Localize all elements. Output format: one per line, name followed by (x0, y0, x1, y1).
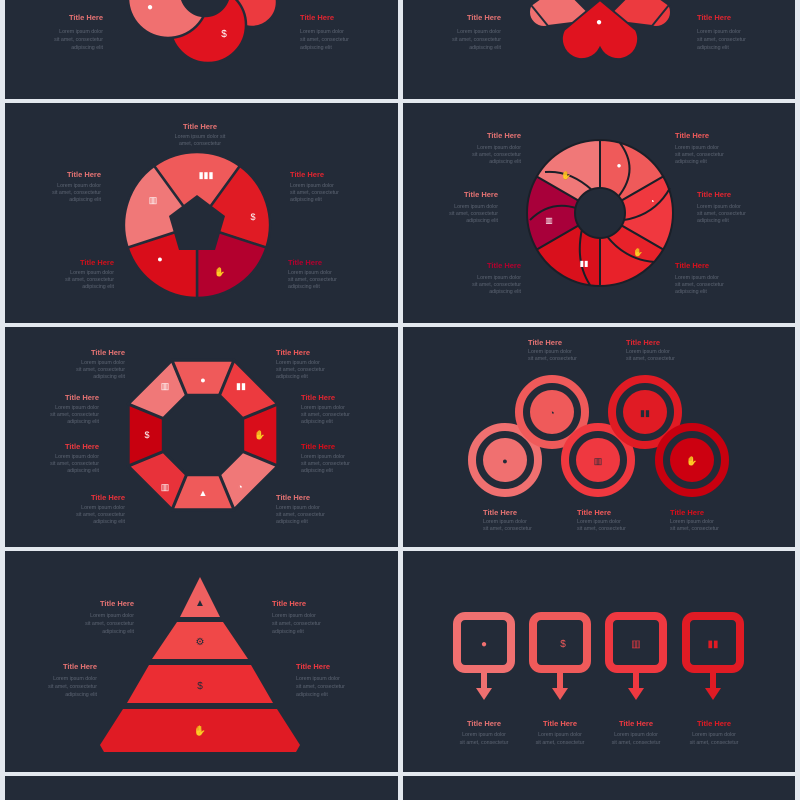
text: mid-right: Lorem ipsum dolor (697, 204, 741, 210)
text: right: Title Here (300, 13, 334, 22)
text: labels: Title Here (63, 662, 97, 671)
text: labels: Lorem ipsum dolor (55, 454, 99, 460)
pyramid layers: ▲ (195, 598, 205, 609)
text: labels: adipiscing elit (301, 419, 333, 425)
text: labels: Title Here (276, 348, 310, 357)
text: labels: Lorem ipsum dolor (296, 676, 340, 682)
text: labels: sit amet, consectetur (85, 621, 134, 627)
text: left: Lorem ipsum dolor (57, 183, 101, 189)
panel: boxes with arrows (457, 616, 740, 746)
text: labels: sit amet, consectetur (76, 367, 125, 373)
text: top-left (472, 131, 522, 165)
text: right: adipiscing elit (697, 45, 729, 51)
text: left: sit amet, consectetur (52, 190, 101, 196)
pyramid layers (100, 577, 300, 752)
pentagon circle chart: ▮▮▮ (199, 170, 213, 180)
pentagon circle chart: ✋ (214, 266, 226, 277)
text: mid-left: Lorem ipsum dolor (454, 204, 498, 210)
text: right: Lorem ipsum dolor (300, 29, 344, 35)
text: labels: adipiscing elit (93, 374, 126, 380)
text: bottom-left: Title Here (80, 258, 114, 267)
swirl diagram: $ (221, 29, 227, 40)
hearts diagram: ● (596, 17, 602, 28)
text: mid-right (697, 190, 746, 224)
text: bottom-right: sit amet, consectetur (288, 277, 337, 283)
text: right: Title Here (290, 170, 324, 179)
text: labels: sit amet, consectetur (301, 461, 350, 467)
text: labels: sit amet, consectetur (276, 367, 325, 373)
text: labels (48, 599, 345, 698)
text: left (52, 170, 102, 203)
box 4 (686, 616, 740, 700)
text: mid-right: Title Here (697, 190, 731, 199)
text: bottom-right (288, 258, 337, 290)
ring inner circles: ▮▮ (640, 408, 650, 418)
panel: pentagon cycle (52, 122, 339, 298)
box 3 (609, 616, 663, 700)
pentagon circle chart: $ (250, 212, 256, 222)
text: labels: Title Here (543, 719, 577, 728)
octagon ring: ● (200, 375, 206, 385)
text: labels: Lorem ipsum dolor (670, 519, 714, 525)
octagon ring: ▥ (161, 381, 169, 391)
text: labels: sit amet, consectetur (301, 412, 350, 418)
swirl chart (527, 140, 673, 286)
text: bottom-left: adipiscing elit (489, 289, 522, 295)
text: labels: adipiscing elit (102, 629, 135, 635)
ring inner circles (483, 390, 714, 482)
text: labels: Title Here (483, 508, 517, 517)
pyramid layers: ⚙ (196, 637, 205, 648)
text: labels: Lorem ipsum dolor (276, 360, 320, 366)
text: top-right: sit amet, consectetur (675, 152, 724, 158)
panel: swirl top-left (54, 0, 349, 63)
text: left (452, 13, 502, 51)
text: labels: Title Here (91, 493, 125, 502)
panel: pyramid (48, 577, 345, 752)
text: labels: Lorem ipsum dolor (692, 732, 736, 738)
rings (472, 379, 725, 493)
text: labels: Title Here (670, 508, 704, 517)
swirl diagram: ● (147, 2, 153, 13)
box 4: ▮▮ (707, 639, 719, 650)
text: left: adipiscing elit (71, 45, 104, 51)
text: bottom-left: Lorem ipsum dolor (477, 275, 521, 281)
text: bottom-right: adipiscing elit (675, 289, 707, 295)
text: labels: Title Here (301, 442, 335, 451)
text: bottom-right: Title Here (288, 258, 322, 267)
hearts diagram (529, 0, 671, 59)
text: labels: Lorem ipsum dolor (462, 732, 506, 738)
text: mid-right: adipiscing elit (697, 218, 729, 224)
ring inner circles: ● (502, 456, 508, 466)
text: right: Title Here (697, 13, 731, 22)
panel: ring chain (472, 338, 725, 532)
pyramid layers: $ (197, 681, 203, 692)
text: labels: Lorem ipsum dolor (53, 676, 97, 682)
text: labels: sit amet, consectetur (690, 740, 739, 746)
text: labels: sit amet, consectetur (536, 740, 585, 746)
text: top-left: Lorem ipsum dolor (477, 145, 521, 151)
text: bottom-left: Lorem ipsum dolor (70, 270, 114, 276)
text: labels: Lorem ipsum dolor (577, 519, 621, 525)
text: bottom-left (65, 258, 115, 290)
text: labels: adipiscing elit (276, 374, 308, 380)
text: left: Lorem ipsum dolor (457, 29, 501, 35)
text: top-left: Title Here (487, 131, 521, 140)
text: labels: sit amet, consectetur (670, 526, 719, 532)
text: top-right (675, 131, 724, 165)
text: right: adipiscing elit (300, 45, 332, 51)
text: labels: sit amet, consectetur (296, 684, 345, 690)
text: labels: sit amet, consectetur (276, 512, 325, 518)
ring inner circles: ▥ (594, 456, 602, 466)
text: top-left: adipiscing elit (489, 159, 522, 165)
text: labels: sit amet, consectetur (48, 684, 97, 690)
octagon ring: ✋ (254, 429, 266, 440)
swirl chart: ▥ (545, 216, 553, 225)
panel: hearts top-right (452, 0, 746, 59)
box 2 (533, 616, 587, 700)
text: top-left: sit amet, consectetur (472, 152, 521, 158)
text: bottom-right: Title Here (675, 261, 709, 270)
text: left: adipiscing elit (469, 45, 502, 51)
text: mid-left: sit amet, consectetur (449, 211, 498, 217)
octagon ring: $ (144, 430, 150, 440)
text: labels: adipiscing elit (301, 468, 333, 474)
swirl chart: ▮▮ (580, 259, 588, 268)
text: labels: Title Here (91, 348, 125, 357)
octagon ring: ◔ (237, 482, 243, 492)
pentagon circle chart (124, 152, 270, 298)
text: labels: Lorem ipsum dolor (276, 505, 320, 511)
text: labels: Title Here (619, 719, 653, 728)
text: labels: Title Here (65, 393, 99, 402)
text: bottom-left: sit amet, consectetur (65, 277, 114, 283)
swirl chart: ● (617, 161, 622, 170)
text: labels: Lorem ipsum dolor (301, 405, 345, 411)
box 2: $ (560, 639, 566, 650)
text: mid-left: adipiscing elit (466, 218, 499, 224)
text: labels: Lorem ipsum dolor (301, 454, 345, 460)
text: labels: sit amet, consectetur (483, 526, 532, 532)
text: labels: Lorem ipsum dolor (528, 349, 572, 355)
text: labels: Lorem ipsum dolor (626, 349, 670, 355)
text: labels: Title Here (272, 599, 306, 608)
text: labels: adipiscing elit (272, 629, 304, 635)
text: labels: sit amet, consectetur (76, 512, 125, 518)
text: bottom-left: adipiscing elit (82, 284, 115, 290)
text: left: Lorem ipsum dolor (59, 29, 103, 35)
box 1 (457, 616, 511, 700)
octagon ring: ▥ (161, 482, 169, 492)
text: top-right: adipiscing elit (675, 159, 707, 165)
text: left: adipiscing elit (69, 197, 102, 203)
text: right (290, 170, 339, 203)
text: left: sit amet, consectetur (452, 37, 501, 43)
text: labels: Lorem ipsum dolor (483, 519, 527, 525)
octagon ring: ▮▮ (236, 381, 246, 391)
text: left: Title Here (467, 13, 501, 22)
panel: octagon (50, 348, 350, 525)
swirl chart: ◔ (650, 197, 655, 206)
text: labels: Lorem ipsum dolor (538, 732, 582, 738)
text: labels: sit amet, consectetur (50, 412, 99, 418)
box 1: ● (481, 639, 487, 650)
ring inner circles: ◔ (549, 408, 555, 418)
text: labels (483, 338, 719, 532)
panel: swirl circle (449, 131, 746, 295)
text: left (54, 13, 104, 51)
text: bottom-left: Title Here (487, 261, 521, 270)
text: labels: Lorem ipsum dolor (81, 360, 125, 366)
text: bottom-right: Lorem ipsum dolor (675, 275, 719, 281)
text: labels: Title Here (467, 719, 501, 728)
text: left: Title Here (67, 170, 101, 179)
text: labels: Title Here (296, 662, 330, 671)
text: labels: sit amet, consectetur (528, 356, 577, 362)
text: right (300, 13, 349, 51)
swirl chart: ✋ (633, 247, 643, 257)
text: right: adipiscing elit (290, 197, 322, 203)
text: top (175, 122, 226, 147)
text: labels: sit amet, consectetur (577, 526, 626, 532)
text: left: Title Here (69, 13, 103, 22)
text: labels: sit amet, consectetur (460, 740, 509, 746)
text: top: amet, consectetur (179, 141, 221, 147)
text: labels: Lorem ipsum dolor (81, 505, 125, 511)
octagon ring: ▲ (199, 488, 207, 498)
text: labels: Lorem ipsum dolor (90, 613, 134, 619)
text: bottom-right: adipiscing elit (288, 284, 320, 290)
text: labels: Title Here (626, 338, 660, 347)
text: top-right: Lorem ipsum dolor (675, 145, 719, 151)
pyramid layers: ✋ (194, 724, 206, 737)
octagon ring (128, 360, 278, 510)
text: labels: adipiscing elit (67, 468, 100, 474)
text: mid-right: sit amet, consectetur (697, 211, 746, 217)
text: labels: adipiscing elit (65, 692, 98, 698)
text: labels: Title Here (65, 442, 99, 451)
text: labels: sit amet, consectetur (50, 461, 99, 467)
text: mid-left (449, 190, 499, 224)
text: top-right: Title Here (675, 131, 709, 140)
text: top: Lorem ipsum dolor sit (175, 134, 226, 140)
text: right: sit amet, consectetur (290, 190, 339, 196)
text: labels: Title Here (301, 393, 335, 402)
box 3: ▥ (631, 639, 641, 650)
text: labels: Lorem ipsum dolor (614, 732, 658, 738)
text: bottom-right: Lorem ipsum dolor (288, 270, 332, 276)
text: labels: sit amet, consectetur (626, 356, 675, 362)
text: labels: adipiscing elit (296, 692, 328, 698)
text: left: sit amet, consectetur (54, 37, 103, 43)
text: labels: Title Here (577, 508, 611, 517)
text: bottom-right: sit amet, consectetur (675, 282, 724, 288)
text: right: Lorem ipsum dolor (697, 29, 741, 35)
text: labels: Title Here (697, 719, 731, 728)
text: labels: Title Here (528, 338, 562, 347)
text: right: sit amet, consectetur (697, 37, 746, 43)
text: labels: sit amet, consectetur (612, 740, 661, 746)
text: right (697, 13, 746, 51)
text: bottom-left (472, 261, 522, 295)
text: labels: adipiscing elit (276, 519, 308, 525)
text: labels: Title Here (100, 599, 134, 608)
text: labels: Lorem ipsum dolor (272, 613, 316, 619)
text: labels: Title Here (276, 493, 310, 502)
text: labels: adipiscing elit (93, 519, 126, 525)
swirl chart: ✋ (561, 170, 571, 180)
swirl diagram (128, 0, 277, 63)
text: bottom-left: sit amet, consectetur (472, 282, 521, 288)
text: labels (460, 719, 739, 746)
pentagon circle chart: ● (157, 254, 163, 264)
text: right: Lorem ipsum dolor (290, 183, 334, 189)
pentagon circle chart: ▥ (149, 195, 157, 205)
ring inner circles: ✋ (686, 455, 698, 466)
text: labels: Lorem ipsum dolor (55, 405, 99, 411)
text: mid-left: Title Here (464, 190, 498, 199)
text: labels: adipiscing elit (67, 419, 100, 425)
text: bottom-right (675, 261, 724, 295)
text: labels: sit amet, consectetur (272, 621, 321, 627)
text: top: Title Here (183, 122, 217, 131)
text: labels (50, 348, 350, 525)
text: right: sit amet, consectetur (300, 37, 349, 43)
